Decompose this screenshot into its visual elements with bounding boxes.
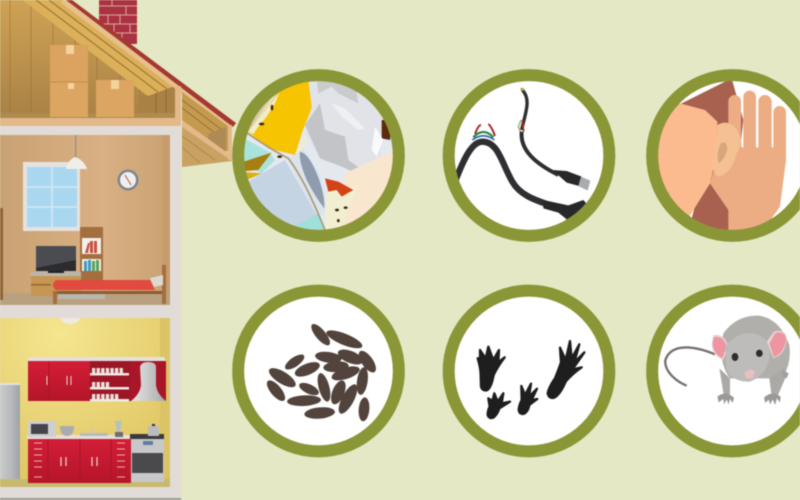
circle: rat droppings xyxy=(238,291,399,451)
eave xyxy=(182,92,232,167)
ear and cupped hand xyxy=(650,78,786,237)
droppings xyxy=(264,321,379,422)
window xyxy=(23,162,80,231)
bowl, sink and blender xyxy=(60,421,123,437)
bookshelf xyxy=(80,227,103,280)
ceiling lamp xyxy=(66,135,87,169)
kitchen xyxy=(0,318,170,487)
bedroom xyxy=(0,135,170,305)
storage boxes xyxy=(50,45,134,117)
circle: hearing noises xyxy=(650,75,800,237)
microwave xyxy=(28,421,56,437)
house cutaway xyxy=(0,0,236,500)
attic xyxy=(0,0,236,127)
circle: chewed wires xyxy=(449,75,609,236)
footprints xyxy=(478,341,584,418)
open shelves xyxy=(90,370,129,402)
fridge xyxy=(0,383,20,479)
TV stand xyxy=(31,276,81,296)
door edge xyxy=(0,208,3,300)
stove xyxy=(130,424,164,482)
upper cabinets xyxy=(27,357,166,401)
circle: garbage and chewed paper xyxy=(238,75,399,236)
bed xyxy=(53,265,166,304)
circle: rat xyxy=(652,291,800,451)
wall clock xyxy=(118,170,138,190)
house walls xyxy=(0,126,181,500)
circle: rodent footprints xyxy=(449,291,609,451)
counter and lower cabinets xyxy=(27,435,131,483)
ceiling light xyxy=(60,318,80,324)
television xyxy=(31,246,81,276)
gnawed cables xyxy=(455,88,590,223)
range hood xyxy=(131,362,166,401)
collage of gnawed food packaging xyxy=(238,77,395,233)
rat illustration xyxy=(665,316,790,405)
chimney xyxy=(99,0,137,44)
